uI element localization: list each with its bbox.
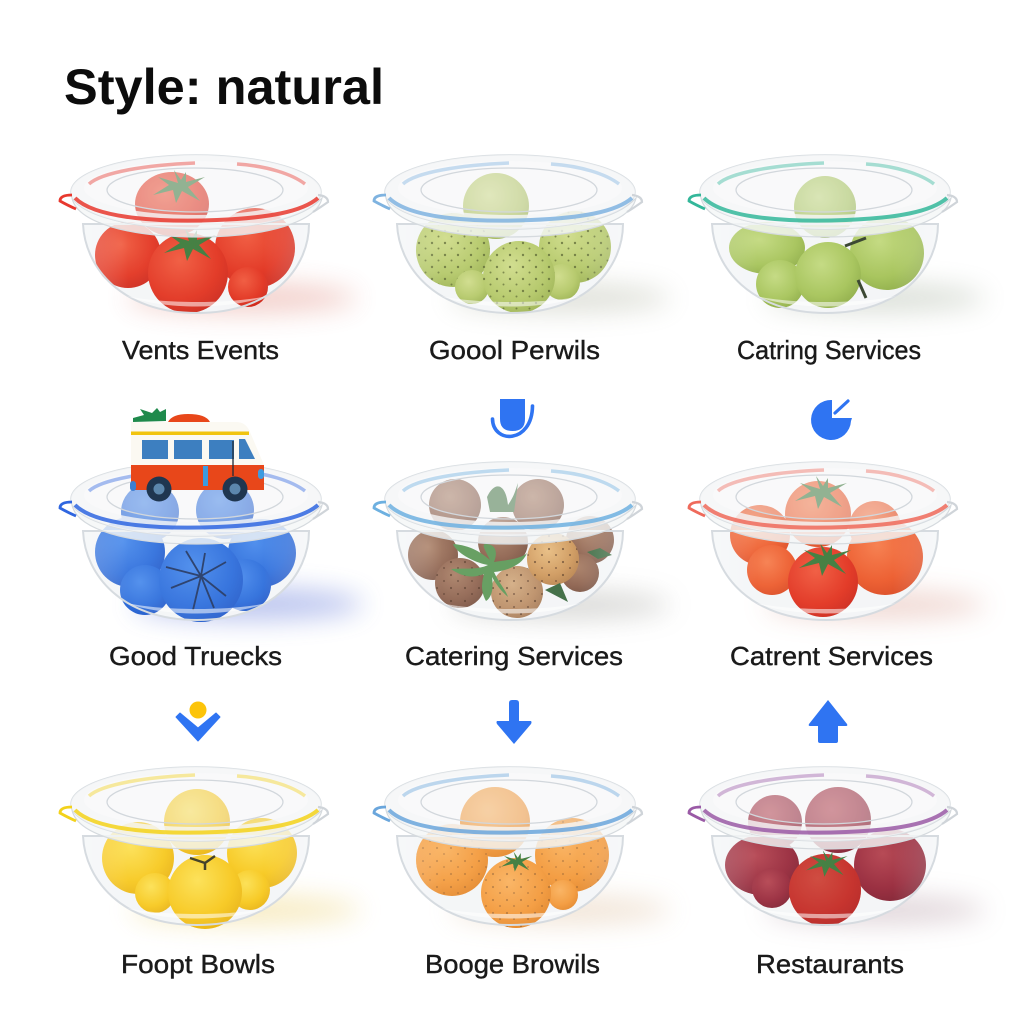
bowl back: [712, 836, 938, 925]
bowl shadow: [450, 284, 670, 312]
label: Vents Events: [122, 335, 279, 365]
panel: Catrent Services orange-red bowl: [689, 462, 985, 620]
clear bowl and lid with blue seal: [374, 155, 642, 313]
bowl back: [397, 224, 623, 313]
panel: Vents Events red tomato bowl: [60, 155, 357, 313]
blue fruit: [95, 481, 296, 622]
truck body: [131, 422, 264, 465]
icon: down arrow: [496, 700, 532, 744]
bowl shadow: [765, 591, 985, 619]
bowl back: [712, 224, 938, 313]
clear bowl and lid with red seal: [689, 462, 957, 620]
truck wheels: [146, 476, 172, 502]
clear bowl and lid with blue seal: [374, 767, 642, 925]
label: Foopt Bowls: [121, 949, 275, 979]
bowl back: [83, 224, 309, 313]
bowl back: [83, 836, 309, 925]
icon: food truck: [130, 408, 264, 502]
bowl back: [397, 531, 623, 620]
label: Goool Perwils: [429, 335, 600, 365]
panel: Foopt Bowls yellow bowl: [60, 767, 360, 929]
icon: blue pie chart: [811, 400, 852, 440]
truck produce: [133, 408, 166, 422]
panel: Good Truecks blue bowl: [60, 462, 363, 622]
panel: Catering Services brown bowl: [374, 462, 670, 620]
brown fruit and leaves: [408, 479, 614, 618]
bowl back: [397, 836, 623, 925]
clear bowl and lid with yellow seal: [60, 767, 328, 925]
bowl back: [83, 531, 309, 620]
panel: Catring Services green tomato bowl: [689, 155, 985, 313]
orange-red tomatoes: [730, 476, 923, 617]
speckled green fruit: [416, 173, 611, 313]
clear bowl and lid with teal seal: [689, 155, 957, 313]
bowl shadow: [127, 283, 357, 313]
icon: chevron with yellow dot: [176, 702, 220, 741]
panel: Restaurants maroon bowl: [689, 767, 985, 926]
tomatoes: [95, 170, 295, 313]
green tomatoes: [729, 176, 924, 308]
icon: blue cup: [492, 399, 532, 436]
label: Catrent Services: [730, 641, 933, 671]
yellow tomatoes: [102, 789, 297, 929]
label: Catring Services: [737, 335, 921, 365]
clear bowl and lid with purple seal: [689, 767, 957, 925]
title: Style: natural: [64, 59, 384, 115]
clear bowl and lid with blue seal: [374, 462, 642, 620]
maroon tomatoes: [725, 787, 926, 926]
label: Booge Browils: [425, 949, 600, 979]
panel: Booge Browils orange bowl: [374, 767, 670, 928]
bowl shadow: [765, 284, 985, 312]
label: Catering Services: [405, 641, 623, 671]
bowl shadow: [450, 896, 670, 924]
bowl shadow: [450, 591, 670, 619]
label: Good Truecks: [109, 641, 282, 671]
panel: Goool Perwils speckled green bowl: [374, 155, 670, 313]
icon: up arrow: [809, 700, 847, 743]
clear bowl and lid with blue seal: [60, 462, 328, 620]
label: Restaurants: [756, 949, 904, 979]
bowl shadow: [130, 896, 360, 924]
bowl back: [712, 531, 938, 620]
clear bowl and lid with red seal: [60, 155, 328, 313]
bowl shadow: [133, 588, 363, 620]
orange fruit: [416, 787, 609, 928]
bowl shadow: [765, 896, 985, 924]
